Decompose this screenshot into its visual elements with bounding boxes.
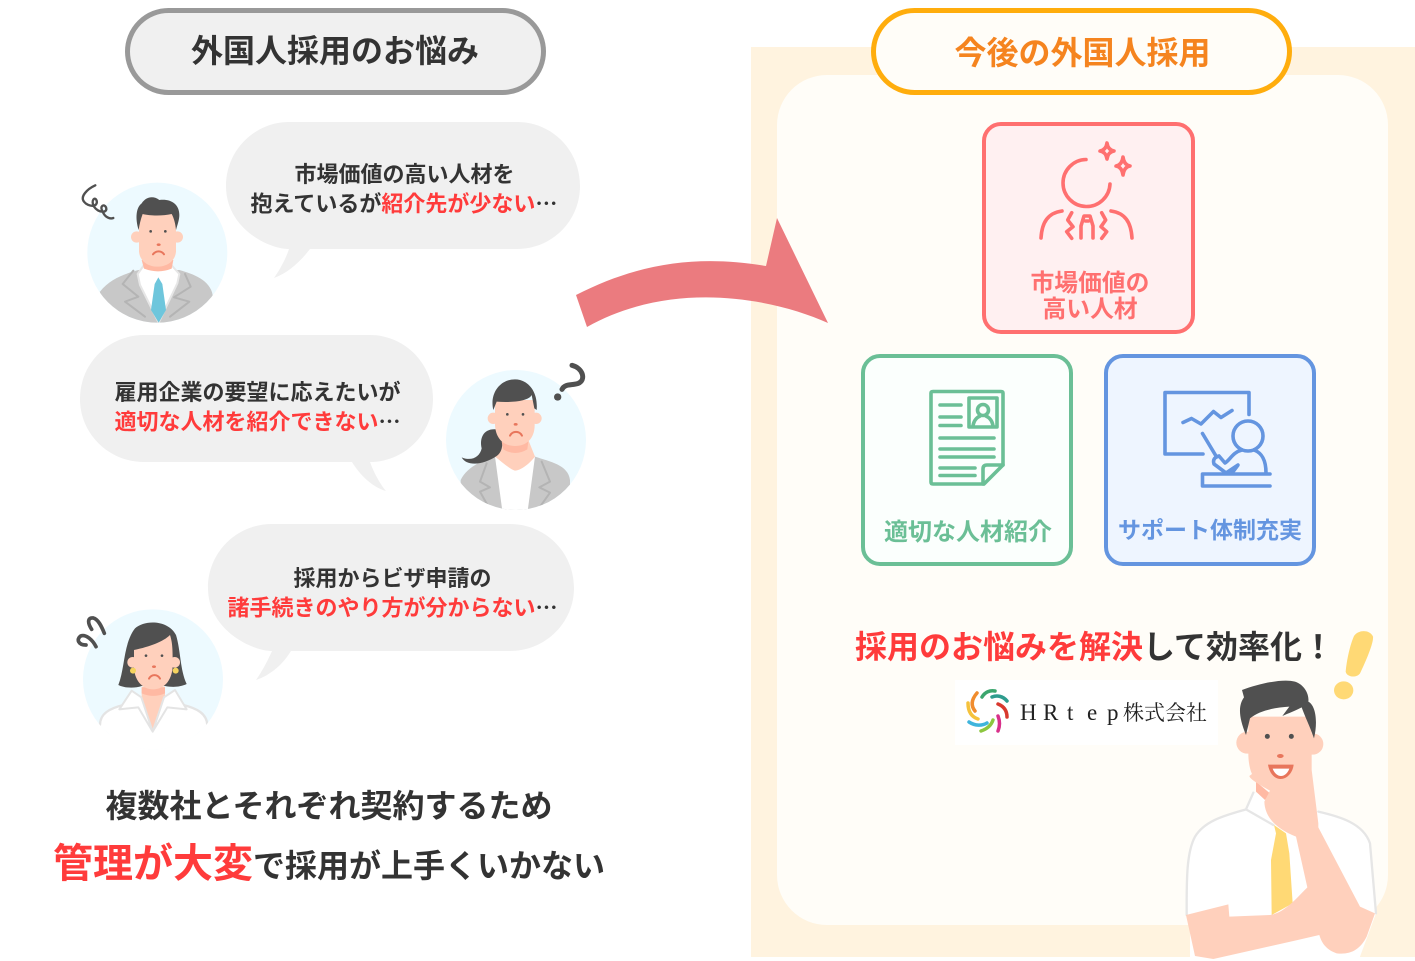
card: appropriate talent referral: [863, 356, 1071, 564]
heading: future recruiting: [874, 10, 1290, 92]
summary text: 複数社とそれぞれ契約するため: [106, 788, 553, 824]
card: high market value talent: 市場価値の: [1030, 270, 1149, 297]
speech bubble 3: 採用からビザ申請の: [294, 566, 492, 591]
summary text: 管理が大変で採用が上手くいかない: [53, 842, 605, 886]
icon: logo swirl: [968, 691, 1007, 731]
logo: HRtep: 株式会社: [1123, 701, 1207, 725]
heading: worries: [128, 10, 544, 92]
card: high market value talent: 高い人材: [1042, 296, 1138, 323]
logo: HRtep: HRtep: [1020, 700, 1118, 725]
icon: exclamation mark: [1334, 631, 1373, 699]
card: appropriate talent referral: 適切な人材紹介: [884, 519, 1052, 546]
icon: resume: [931, 392, 1003, 484]
icon: sparkling person: [1041, 143, 1132, 238]
heading: future recruiting: 今後の外国人採用: [954, 35, 1211, 71]
person 1: worried man: [83, 183, 227, 327]
card: high market value talent: [984, 124, 1193, 332]
conclusion text: 採用のお悩みを解決して効率化！: [855, 622, 1334, 668]
card: support structure: サポート体制充実: [1118, 517, 1302, 543]
card: support structure: [1106, 356, 1314, 564]
logo: HRtep: [955, 680, 1218, 745]
speech bubble 1: 市場価値の高い人材を: [294, 162, 515, 187]
speech bubble 3: [208, 524, 574, 680]
speech bubble 2: [80, 335, 433, 491]
person 3: troubled woman: [76, 610, 223, 733]
speech bubble 2: 雇用企業の要望に応えたいが: [114, 380, 401, 405]
panel: future recruiting background: [751, 47, 1415, 961]
speech bubble 1: [226, 122, 580, 278]
heading: worries: 外国人採用のお悩み: [191, 33, 479, 69]
summary text: [53, 788, 605, 886]
person: smiling man with exclamation mark: [1186, 631, 1376, 959]
arrow: [576, 218, 828, 327]
speech bubble 2: 適切な人材を紹介できない…: [114, 405, 401, 437]
speech bubble 1: 抱えているが紹介先が少ない…: [250, 187, 557, 219]
speech bubble 3: 諸手続きのやり方が分からない…: [228, 591, 558, 623]
icon: presenter at whiteboard: [1165, 392, 1270, 486]
person 2: puzzled woman: [446, 365, 586, 513]
